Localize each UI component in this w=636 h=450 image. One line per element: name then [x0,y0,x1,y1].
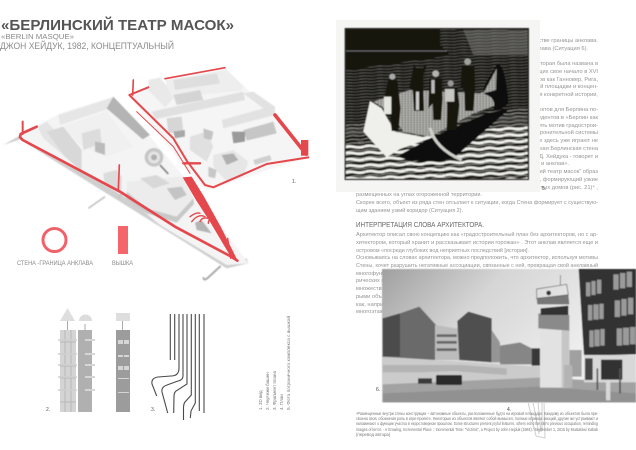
footnote: ⁴Размещенные внутри стены конструкции – автономные объекты, расположенные будто на игровой площадке. Каждому из объектов была при- [356,411,598,416]
body text: многофунк [356,271,385,277]
rotated figure captions: 2. Чертежи башен [265,372,270,410]
body text [356,38,599,315]
body text: же здесь уже играют не [535,138,598,144]
faint plan sketch [528,402,545,438]
label 2: 2. [46,407,50,413]
red towers and wedge [183,140,308,260]
body text: размещенных на углах огороженной территории. [356,191,482,198]
woodcut panel [336,20,540,192]
body text: тудентов в «Берлин как [536,115,598,121]
body text: хитектором, который хранит и рассказывает истории горожан» . Этот анклав является еще и [356,239,598,246]
body text: Основываясь на словах архитектора, можно предположить, что архитектор, используя мотивы [356,255,598,261]
body text: Стены, хочет разрушить негативные ассоциации, связанные с ней, превращая свой анклавный [356,262,598,269]
body text: рыми объ [356,294,382,300]
footnote [356,411,599,437]
label 5: 5. [542,186,546,192]
body text: дов как Ганновер, Рига, [536,77,598,83]
legend: tower [112,226,133,267]
body text: тых домов (рис. 21)⁴ , [541,184,598,191]
label 6: 6. [376,387,380,393]
rotated figure captions [258,315,291,410]
legend: wall: СТЕНА -ГРАНИЦА АНКЛАВА [17,261,93,267]
body text: рических с [356,278,384,284]
body text: щих свое начало в XVI [538,69,598,75]
body text: щим зданием узкий коридор (Ситуация 2). [356,207,463,214]
woodcut illustration [345,28,529,180]
body text: торая была названа в [540,61,598,67]
body text: множеств [356,286,382,292]
body text: ий театр масок" образ [539,168,598,175]
footnote: своена своя, обозначая роль в игре-проекте. Некоторые из объектов являют собой вымысел, полные игривых эмоций, другие же устраивают и [356,416,598,421]
label 1: 1. [292,179,296,185]
watchtower [537,275,572,388]
body text: ой площадки и концен- [537,83,598,90]
3D site plan [3,68,308,279]
body text: нная Берлинская стена [536,146,599,152]
red wall [20,68,308,261]
island [363,65,510,161]
body text: ИНТЕРПРЕТАЦИЯ СЛОВА АРХИТЕКТОРА. [356,222,484,229]
body text: и, формирующий узкие [536,176,598,183]
rotated figure captions: 4. План [279,394,284,410]
figures [384,58,475,131]
body text: от и анклав». [534,161,569,167]
right building [579,269,636,400]
rotated figure captions: 3. Фрагмент плана [272,370,277,410]
subtitle [0,34,174,51]
label 3: 3. [151,407,155,413]
subtitle: ДЖОН ХЕЙДУК, 1982, КОНЦЕПТУАЛЬНЫЙ [0,40,174,51]
body text: оронительной системы [537,129,598,136]
body text: Д. Хейдука - говорят и [539,153,598,160]
body text: я конкретной истории, [539,91,598,98]
title: «БЕРЛИНСКИЙ ТЕАТР МАСОК» [1,16,234,34]
label 4: 4. [507,407,511,413]
vehicle [418,375,462,385]
body text: многоэтаж [356,309,384,315]
wall plan lines [152,314,204,420]
footnote: (перевод автора) [356,432,391,437]
body text: Скорее всего, объект из ряда стен отсылает к ситуации, когда Стена формирует с существую- [356,200,598,206]
body text: островом «посреди глубоких вод неприятных последствий [истории]. [356,247,529,254]
tower drawings [58,308,130,412]
body text: как, напри [356,302,383,308]
buildings [37,69,277,233]
legend: tower: ВЫШКА [112,261,133,267]
body text: ректов для Берлина по- [535,107,598,113]
body text: Архитектор описал свою концепцию как «градостроительный план без архитекторов, но с ар- [356,231,598,238]
rotated figure captions: 1. 3D вид [258,390,263,410]
body text: стве границы анклава. [538,38,598,44]
rotated figure captions: 5. Фото пограничного комплекса с вышкой [285,315,291,410]
photo of border tower [382,269,636,402]
subtitle: «BERLIN MASQUE» [1,34,74,41]
body text: лава (Ситуация 6). [538,46,588,52]
legend: wall [17,228,93,267]
body text: ить мотив градострои- [539,123,598,129]
